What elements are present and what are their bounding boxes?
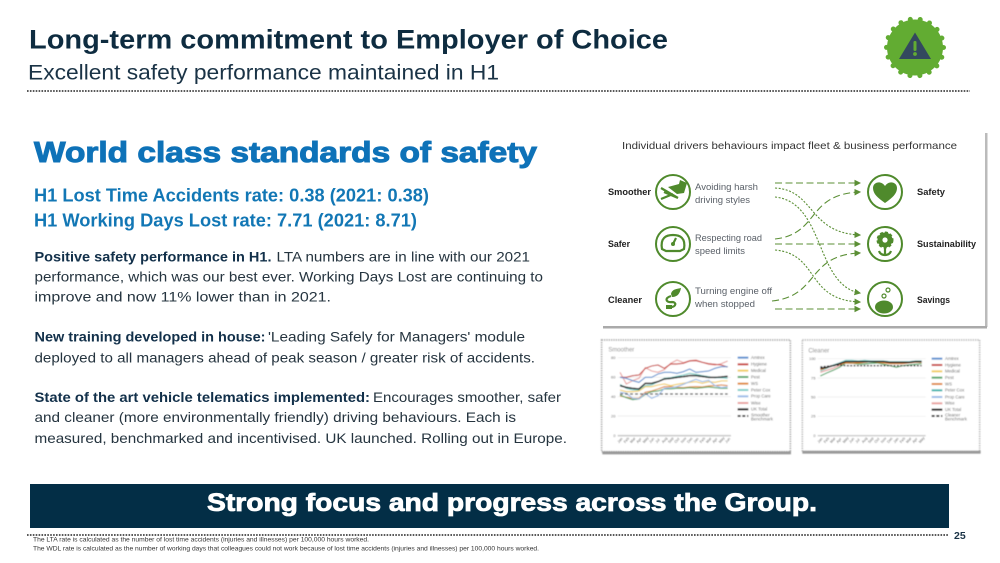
chart: smoother: Feb	[699, 437, 706, 444]
icon: warning badge	[886, 19, 944, 76]
chart: cleaner: Apr	[912, 436, 919, 444]
chart: cleaner: Benchmark	[945, 417, 968, 422]
chart: smoother: Hygiene	[751, 362, 767, 367]
footnotes	[33, 536, 539, 552]
chart: cleaner: Jan	[893, 437, 900, 444]
icon: heart	[868, 175, 902, 209]
banner: Strong focus and progress across the Group.	[207, 490, 817, 517]
chart: cleaner: Feb	[899, 437, 906, 444]
chart: cleaner: May	[918, 436, 926, 444]
chart: cleaner: 25	[811, 414, 816, 419]
chart: cleaner: May	[842, 436, 850, 444]
chart: cleaner: Pest	[945, 375, 954, 380]
text block: training	[34, 329, 535, 366]
chart: smoother: Peter Cox	[751, 387, 771, 392]
chart: smoother: May	[642, 436, 650, 444]
icon: piggy bank	[868, 282, 902, 316]
text block: training: New training developed in house:	[34, 329, 266, 345]
chart: cleaner: Amtrex	[945, 356, 960, 361]
chart: smoother: May	[718, 436, 726, 444]
label: sustainability: Sustainability	[917, 239, 976, 249]
chart: smoother: UK Total	[751, 407, 767, 412]
WDL rate: H1 Working Days Lost rate: 7.71 (2021: 8.71)	[34, 210, 417, 231]
chart: cleaner: Dec	[886, 436, 894, 444]
chart: cleaner: Mar	[829, 436, 837, 444]
chart: smoother: Jul	[655, 438, 661, 444]
chart: smoother: Smoother	[608, 348, 634, 354]
chart: cleaner: Prop Care	[945, 394, 965, 399]
text: avoiding harsh: driving styles	[695, 195, 750, 206]
chart: cleaner: Apr	[836, 436, 843, 444]
label: safer: Safer	[608, 239, 630, 249]
chart: smoother: Mar	[705, 436, 713, 444]
LTA rate: H1 Lost Time Accidents rate: 0.38 (2021: 0.38)	[34, 184, 429, 206]
chart: smoother: Jan	[693, 437, 700, 444]
chart: cleaner: Mar	[905, 436, 913, 444]
text block: safety performance	[34, 249, 543, 305]
chart: cleaner	[802, 340, 981, 454]
chart: cleaner: Cleaner	[808, 348, 829, 354]
chart: smoother	[602, 340, 791, 454]
chart: cleaner: Jul	[855, 438, 861, 444]
title: Long-term commitment to Employer of Choice	[29, 24, 668, 54]
text block: safety performance: improve and now 11% lower than in 2021.	[34, 289, 331, 305]
chart: smoother: Apr	[636, 436, 643, 444]
chart: smoother: WS	[751, 381, 758, 386]
label: safety: Safety	[917, 187, 945, 197]
text block: telematics: measured, benchmarked and incentivised. UK launched. Rolling out in Europe.	[34, 430, 567, 446]
chart: smoother: Feb	[623, 437, 630, 444]
chart: cleaner: WS	[945, 381, 952, 386]
chart: smoother: Prop Care	[751, 394, 771, 399]
chart: smoother: Jan	[617, 437, 624, 444]
chart: cleaner: Wise	[945, 401, 955, 406]
chart: smoother: Aug	[661, 436, 668, 444]
banner	[30, 484, 949, 528]
label: cleaner: Cleaner	[608, 295, 642, 305]
page number: 25	[954, 530, 966, 542]
text block: safety performance: LTA numbers are in line with our 2021	[276, 249, 530, 265]
label: smoother: Smoother	[608, 187, 651, 197]
chart: smoother: 20	[611, 413, 616, 418]
chart: cleaner: 50	[811, 394, 816, 399]
chart: smoother: 80	[611, 355, 616, 360]
text: respecting road: speed limits	[695, 246, 745, 257]
chart: cleaner: Aug	[861, 436, 868, 444]
arrows	[772, 183, 860, 309]
chart: smoother: Mar	[629, 436, 637, 444]
chart: smoother: Amtrex	[751, 355, 766, 360]
text block: safety performance: Positive safety performance in H1.	[34, 249, 272, 265]
chart: cleaner: Jan	[817, 437, 824, 444]
icon: flower	[868, 227, 902, 261]
text: turning engine: Turning engine off	[695, 286, 772, 297]
chart: smoother: 40	[611, 394, 616, 399]
chart: smoother: Jun	[648, 437, 655, 444]
text block: telematics: State of the art vehicle telematics implemented:	[34, 389, 370, 405]
chart: smoother: Benchmark	[751, 417, 774, 422]
text block: telematics: Encourages smoother, safer	[373, 389, 561, 405]
chart: cleaner: Feb	[823, 437, 830, 444]
text: respecting road: Respecting road	[695, 233, 762, 244]
text block: training: deployed to all managers ahead of peak season / greater risk of accidents.	[34, 350, 535, 366]
chart: cleaner: Medical	[945, 369, 960, 374]
chart: cleaner: Oct	[874, 437, 880, 444]
chart: smoother: Oct	[674, 437, 680, 444]
label: savings: Savings	[917, 295, 950, 305]
chart: cleaner: 100	[809, 356, 816, 361]
chart: smoother: Dec	[686, 436, 694, 444]
chart: smoother: Medical	[751, 368, 766, 373]
icon: speedometer	[656, 227, 690, 261]
chart: smoother: Jun	[724, 437, 731, 444]
text block: training: 'Leading Safely for Managers' module	[268, 329, 525, 345]
chart: cleaner: Jun	[848, 437, 855, 444]
heading: world class standards: World class standards of safety	[34, 137, 537, 169]
chart: cleaner: Sep	[867, 436, 875, 444]
chart: cleaner: Hygiene	[945, 362, 961, 367]
icon: leaf and plug	[656, 282, 690, 316]
chart: cleaner: Nov	[880, 436, 887, 444]
text block: safety performance: performance, which was our best ever. Working Days Lost are continuing to	[34, 269, 543, 285]
footnotes: The WDL rate is calculated as the number of working days that colleagues could not work because of lost time accidents (injuries and illnesses) per 100,000 hours worked.	[33, 546, 539, 552]
text: turning engine	[694, 286, 772, 310]
text: avoiding harsh: Avoiding harsh	[695, 182, 758, 193]
chart: smoother: Wise	[751, 400, 761, 405]
chart: cleaner: 75	[811, 375, 816, 380]
diagram heading: Individual drivers behaviours impact fleet & business performance	[622, 141, 957, 152]
text block: telematics	[34, 389, 567, 446]
subtitle: Excellent safety performance maintained in H1	[28, 60, 499, 84]
text block: telematics: and cleaner (more environmentally friendly) driving behaviours. Each is	[34, 409, 516, 425]
text: avoiding harsh	[695, 182, 758, 206]
chart: cleaner: 0	[813, 433, 816, 438]
footnotes: The LTA rate is calculated as the number of lost time accidents (injuries and illnesses) per 100,000 hours worked.	[33, 536, 369, 544]
chart: cleaner: Cleaner	[945, 413, 961, 418]
chart: cleaner: UK Total	[945, 407, 961, 412]
chart: smoother: 60	[611, 375, 616, 380]
chart: cleaner: Peter Cox	[945, 388, 965, 393]
panel: driver behaviours diagram	[603, 133, 988, 328]
chart: smoother: Sep	[667, 436, 675, 444]
text: turning engine: when stopped	[694, 299, 755, 310]
chart: smoother: Apr	[712, 436, 719, 444]
text: respecting road	[695, 233, 762, 257]
icon: foot on pedal	[656, 175, 690, 209]
chart: smoother: Smoother	[751, 413, 770, 418]
chart: smoother: 0	[613, 433, 616, 438]
chart: smoother: Pest	[751, 374, 760, 379]
chart: smoother: Nov	[680, 436, 687, 444]
